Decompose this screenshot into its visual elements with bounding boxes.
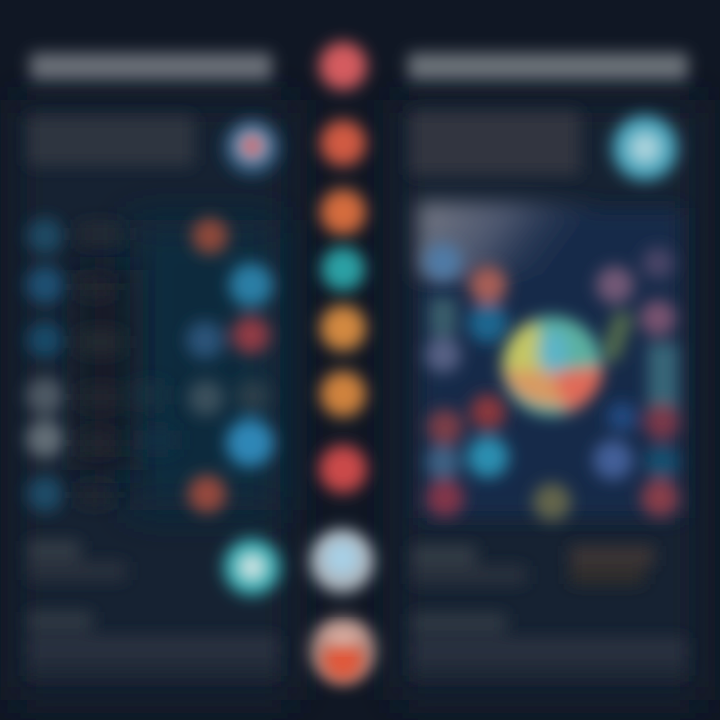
left panel: lower text block [28,541,126,580]
list icon 6 [27,476,63,512]
icon: blue dot [229,263,273,307]
right panel: illustration card [418,202,682,521]
list icon 2 [26,266,64,304]
icon: teal circle 4 [321,247,365,291]
icon: left lower badge [223,538,281,596]
list icon 4 [26,377,64,415]
icon: amber circle 5 [320,305,366,351]
icon: right top badge [612,115,678,181]
right panel: lower text left [412,546,526,584]
icon: blue small dot [186,321,224,359]
chart: central pie [502,316,603,416]
icon: orange dot lower [188,475,226,513]
icon: left top badge [223,119,281,177]
left panel: intro text block [28,116,194,166]
icon: orange circle 3 [320,189,366,235]
icon: amber circle 6 [320,371,366,417]
list icon 1 [27,218,63,254]
icon: white circle 8 [310,529,374,593]
right panel: footer text [412,614,686,676]
icon: red circle 7 [319,445,367,493]
illustration: scattered icons [424,243,680,521]
right panel: intro text block [410,111,580,175]
icon: white-orange circle 9 [310,617,376,683]
list icon 5 [26,420,64,458]
icon: red dot [232,316,270,354]
icon: red-orange circle 2 [320,120,366,166]
center column of icons [310,42,376,683]
left panel: list text [78,226,175,502]
left panel: footer text [28,612,278,676]
left panel: coloured icons [186,218,274,513]
list icon 3 [27,322,63,358]
icon: orange dot [192,218,228,254]
icon: grey dot [188,380,224,416]
right heading [408,53,688,80]
icon: red circle 1 [319,42,367,90]
icon: dim dot [236,379,270,413]
card background [418,202,682,518]
icon: bright blue dot [226,419,274,467]
left heading [30,53,272,80]
left panel: list icons [26,218,64,512]
right panel: lower text right [570,546,654,584]
